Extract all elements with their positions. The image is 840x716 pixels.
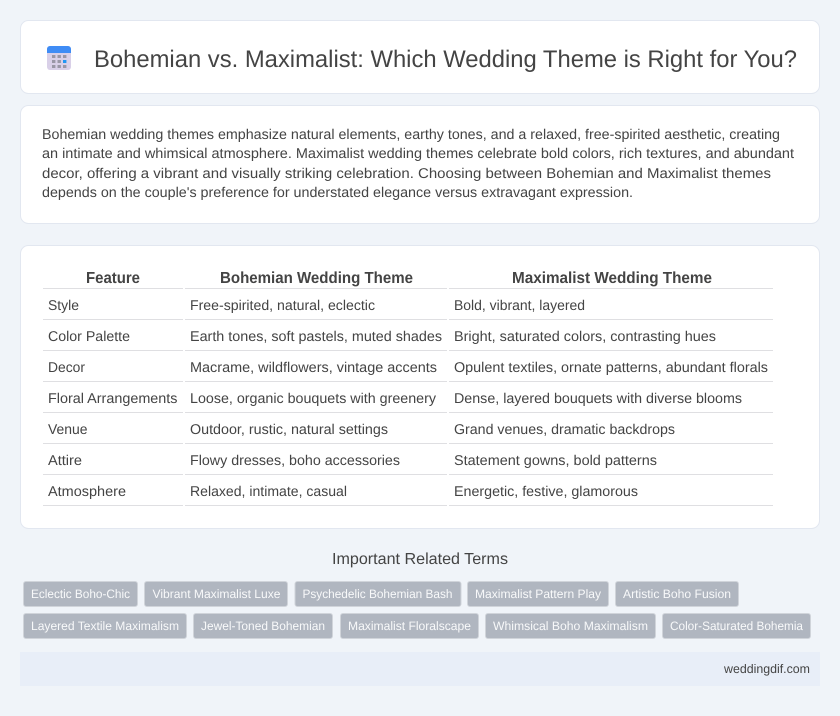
tag xyxy=(662,614,810,638)
table header row: Feature xyxy=(86,270,140,287)
row: style xyxy=(48,298,585,314)
related term tags xyxy=(24,582,810,638)
row: floral arrangements xyxy=(48,391,742,407)
tag xyxy=(616,582,738,606)
tag xyxy=(295,582,461,606)
row: atmosphere: Energetic, festive, glamorous xyxy=(454,484,638,500)
tag xyxy=(340,614,478,638)
row: color palette: Bright, saturated colors, contrasting hues xyxy=(454,329,716,345)
panel: introduction xyxy=(20,106,820,224)
row: floral arrangements: Floral Arrangements xyxy=(48,391,178,407)
tag: Layered Textile Maximalism xyxy=(31,619,179,633)
tag: Artistic Boho Fusion xyxy=(623,587,731,601)
row: color palette xyxy=(48,329,716,345)
row: venue: Grand venues, dramatic backdrops xyxy=(454,422,675,438)
tag: Maximalist Floralscape xyxy=(348,619,471,633)
row: decor xyxy=(48,360,768,376)
row: attire: Flowy dresses, boho accessories xyxy=(190,453,400,469)
row: venue: Venue xyxy=(48,422,88,438)
row: color palette: Earth tones, soft pastels, muted shades xyxy=(190,329,442,345)
tag: Eclectic Boho-Chic xyxy=(31,587,130,601)
row: venue: Outdoor, rustic, natural settings xyxy=(190,422,388,438)
table header row: Maximalist Wedding Theme xyxy=(512,270,712,287)
row: attire xyxy=(48,453,657,469)
row: floral arrangements: Loose, organic bouquets with greenery xyxy=(190,391,437,407)
tag xyxy=(194,614,332,638)
table header row: Bohemian Wedding Theme xyxy=(220,270,413,287)
tag: Vibrant Maximalist Luxe xyxy=(152,587,281,601)
row: style: Style xyxy=(48,298,79,314)
panel: comparison table xyxy=(20,246,820,528)
title: Bohemian vs. Maximalist: Which Wedding Theme is Right for You? xyxy=(94,46,797,73)
row: atmosphere xyxy=(48,484,638,500)
table header row xyxy=(86,270,712,287)
row: atmosphere: Relaxed, intimate, casual xyxy=(190,484,347,500)
intro text: Bohemian wedding themes emphasize natural elements, earthy tones, and a relaxed, free-spirited aesthetic, creating xyxy=(42,127,780,143)
tag: Whimsical Boho Maximalism xyxy=(493,619,648,633)
row: attire: Statement gowns, bold patterns xyxy=(454,453,657,469)
header panel xyxy=(20,20,820,94)
row: decor: Opulent textiles, ornate patterns, abundant florals xyxy=(454,360,768,376)
tag: Maximalist Pattern Play xyxy=(475,587,602,601)
footer site name: weddingdif.com xyxy=(723,662,810,676)
row: atmosphere: Atmosphere xyxy=(48,484,126,500)
tag: Psychedelic Bohemian Bash xyxy=(302,587,452,601)
heading: important related terms: Important Related Terms xyxy=(332,551,508,568)
tag: Jewel-Toned Bohemian xyxy=(201,619,325,633)
tag xyxy=(24,582,138,606)
row: venue xyxy=(48,422,675,438)
tag xyxy=(468,582,608,606)
tag xyxy=(24,614,186,638)
tag xyxy=(144,582,288,606)
row: style: Bold, vibrant, layered xyxy=(454,298,585,314)
intro text: decor, offering a vibrant and visually striking celebration. Choosing between Bohemian and Maximalist themes xyxy=(42,166,771,182)
row: floral arrangements: Dense, layered bouquets with diverse blooms xyxy=(454,391,742,407)
intro text: depends on the couple's preference for understated elegance versus extravagant expression. xyxy=(42,185,633,201)
row: decor: Decor xyxy=(48,360,85,376)
row: style: Free-spirited, natural, eclectic xyxy=(190,298,375,314)
tag xyxy=(486,614,656,638)
row: color palette: Color Palette xyxy=(48,329,130,345)
intro text xyxy=(42,127,794,201)
row: attire: Attire xyxy=(48,453,82,469)
footer xyxy=(20,652,820,686)
tag: Color-Saturated Bohemia xyxy=(670,619,803,633)
intro text: an intimate and whimsical atmosphere. Maximalist wedding themes celebrate bold colors, rich textures, and abundant xyxy=(42,146,794,162)
row: decor: Macrame, wildflowers, vintage accents xyxy=(190,360,437,376)
icon: calendar xyxy=(47,46,71,70)
